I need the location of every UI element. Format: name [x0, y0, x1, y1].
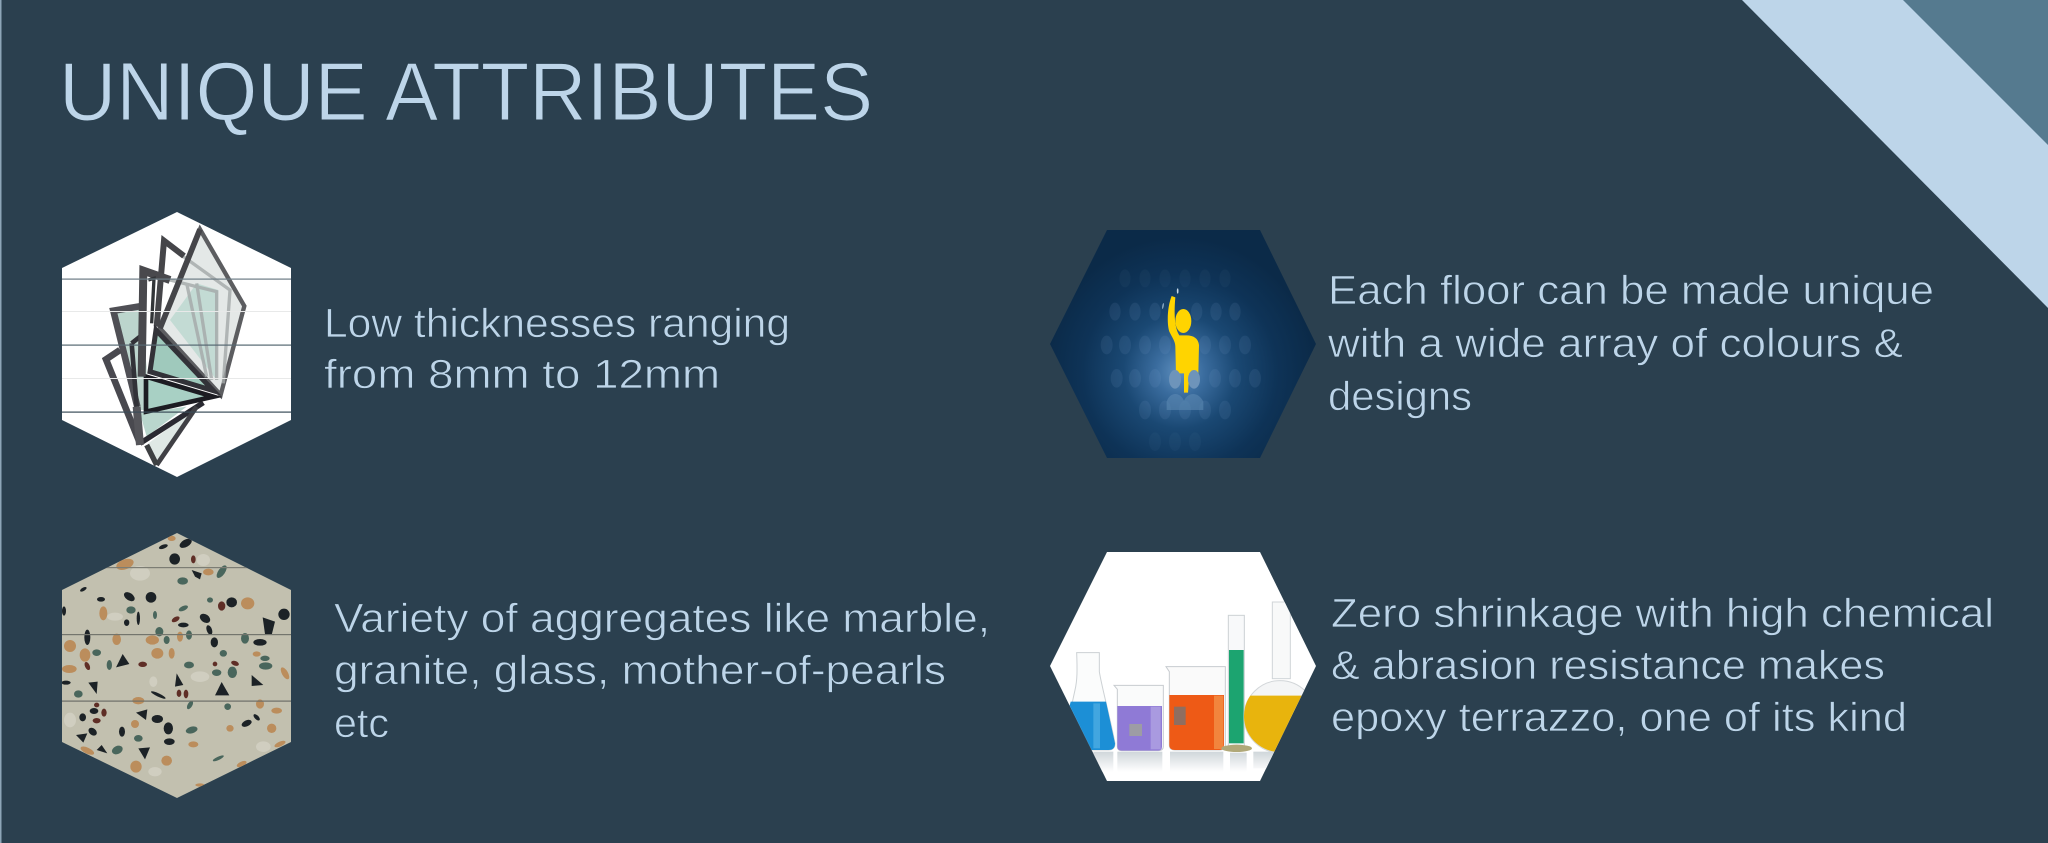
panel: low thickness: [60, 210, 790, 480]
text: unique floors: [1327, 267, 1934, 419]
blue flask: [1063, 653, 1115, 750]
icon: hexagon with glass window frames: [60, 210, 295, 480]
central triangles: [146, 377, 213, 412]
icon: hexagon with laboratory glassware: [1048, 550, 1318, 783]
text: aggregates: Variety of aggregates like marble,: [334, 595, 990, 641]
bottom glass: [140, 407, 187, 437]
frame 2: [157, 241, 184, 327]
purple beaker: [1114, 685, 1163, 751]
text: unique floors: with a wide array of colours &: [1327, 320, 1903, 366]
text: low thickness: from 8mm to 12mm: [324, 351, 720, 397]
text: aggregates: granite, glass, mother-of-pearls: [334, 647, 946, 693]
text: chemical resistance: & abrasion resistance makes: [1331, 642, 1885, 688]
faded upper glass: [160, 229, 244, 395]
text: unique floors: designs: [1328, 373, 1472, 419]
icon: hexagon with terrazzo texture: [60, 530, 295, 800]
text: unique floors: Each floor can be made unique: [1328, 267, 1934, 313]
yellow flask: [1272, 602, 1290, 679]
text: aggregates: [334, 595, 990, 746]
text: chemical resistance: Zero shrinkage with high chemical: [1331, 590, 1994, 636]
reflections: [1093, 752, 1273, 773]
frame 4 and 5 strips: [118, 310, 147, 410]
icon: hexagon with yellow person raising hand: [1048, 228, 1318, 460]
panel: unique floors: [1048, 228, 1934, 460]
green cylinder: [1228, 615, 1244, 749]
title: UNIQUE ATTRIBUTES: [59, 45, 873, 138]
corner decoration: diagonal bands: [1742, 0, 2048, 308]
text: chemical resistance: epoxy terrazzo, one of its kind: [1331, 694, 1907, 740]
panel: aggregates: [60, 530, 990, 800]
panel: chemical resistance: [1048, 550, 1994, 783]
frame 3: [142, 271, 170, 377]
orange beaker: [1166, 667, 1225, 750]
text: chemical resistance: [1331, 590, 1994, 740]
text: low thickness: Low thicknesses ranging: [324, 300, 790, 346]
text: aggregates: etc: [334, 700, 389, 746]
text: low thickness: [324, 300, 790, 397]
